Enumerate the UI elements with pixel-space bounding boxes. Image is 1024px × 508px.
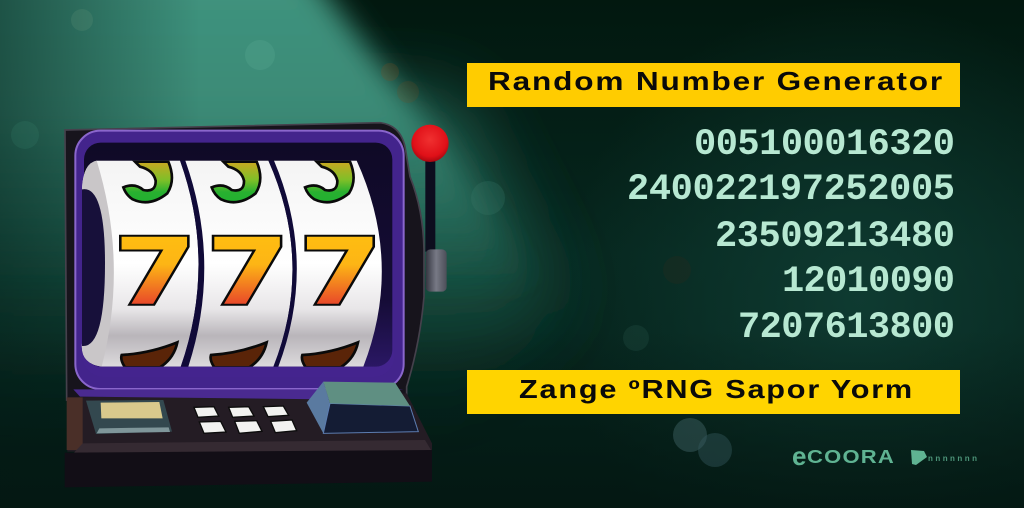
logo: e <box>792 441 806 471</box>
random number list: 240022197252005 <box>627 169 955 211</box>
logo: nnnnnnn <box>928 454 977 463</box>
base <box>65 393 432 487</box>
screen frame <box>73 131 404 399</box>
large button <box>307 382 418 433</box>
reel 3 <box>274 161 382 367</box>
bill screen <box>86 400 172 434</box>
logo: COORA <box>807 447 895 467</box>
title banner: Random Number Generator <box>488 66 944 96</box>
random number list: 7207613800 <box>738 307 955 349</box>
title banner <box>467 63 960 107</box>
reel sevens: 7 <box>114 219 197 326</box>
bottom banner <box>467 370 960 414</box>
random number list: 005100016320 <box>694 124 955 166</box>
random number list: 23509213480 <box>715 216 955 258</box>
reel sevens <box>114 219 382 326</box>
reel sevens: 7 <box>206 219 289 326</box>
cabinet body <box>65 123 424 400</box>
reel 2 <box>185 161 292 367</box>
slot machine <box>65 123 449 487</box>
logo <box>792 441 977 471</box>
reel sevens: 7 <box>299 219 382 326</box>
reel 1 <box>82 161 199 367</box>
bottom banner: Zange ºRNG Sapor Yorm <box>519 374 914 404</box>
random number list: 12010090 <box>782 261 955 303</box>
reels <box>82 160 382 367</box>
lever <box>411 125 449 292</box>
random number list <box>627 124 955 349</box>
control buttons <box>194 406 297 433</box>
